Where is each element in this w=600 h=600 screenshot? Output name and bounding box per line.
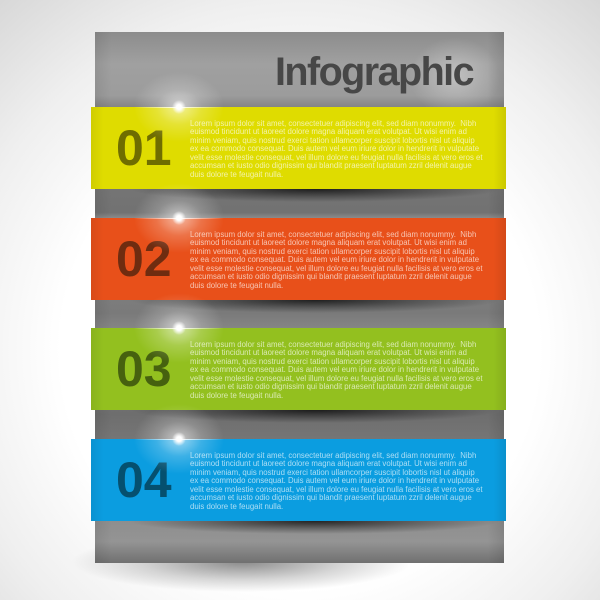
panel edge shading <box>95 32 504 563</box>
light flare 2 <box>135 186 223 250</box>
text block 02: Lorem ipsum dolor sit amet, consectetuer adipiscing elit, sed diam nonummy. Nibh euismod tincidunt ut laoreet dolore magna aliquam erat volutpat. Ut wisi enim ad minim veniam, quis nostrud exerci tation ullamcorper suscipit lobortis nisl ut aliquip ex ea commodo consequat. Duis autem vel eum iriure dolor in hendrerit in vulputate velit esse molestie consequat, vel illum dolore eu feugiat nulla facilisis at vero eros et accumsan et iusto odio dignissim qui blandit praesent luptatum zzril delenit augue duis dolore te feugait nulla. <box>190 230 483 290</box>
number 02: 02 <box>116 231 172 287</box>
band shadow 2 <box>130 300 500 313</box>
light flare 3 <box>136 296 222 360</box>
light flare 4 <box>135 408 223 471</box>
panel: band 04 <box>91 439 506 521</box>
panel: band 01 <box>91 107 506 189</box>
text block 01: Lorem ipsum dolor sit amet, consectetuer adipiscing elit, sed diam nonummy. Nibh euismod tincidunt ut laoreet dolore magna aliquam erat volutpat. Ut wisi enim ad minim veniam, quis nostrud exerci tation ullamcorper suscipit lobortis nisl ut aliquip ex ea commodo consequat. Duis autem vel eum iriure dolor in hendrerit in vulputate velit esse molestie consequat, vel illum dolore eu feugiat nulla facilisis at vero eros et accumsan et iusto odio dignissim qui blandit praesent luptatum zzril delenit augue duis dolore te feugait nulla. <box>190 119 483 179</box>
panel: band 03 <box>91 328 506 410</box>
number 04: 04 <box>116 452 172 508</box>
text block 04: Lorem ipsum dolor sit amet, consectetuer adipiscing elit, sed diam nonummy. Nibh euismod tincidunt ut laoreet dolore magna aliquam erat volutpat. Ut wisi enim ad minim veniam, quis nostrud exerci tation ullamcorper suscipit lobortis nisl ut aliquip ex ea commodo consequat. Duis autem vel eum iriure dolor in hendrerit in vulputate velit esse molestie consequat, vel illum dolore eu feugiat nulla facilisis at vero eros et accumsan et iusto odio dignissim qui blandit praesent luptatum zzril delenit augue duis dolore te feugait nulla. <box>190 451 483 511</box>
band shadow 4 <box>130 521 500 534</box>
light flare 1 <box>135 80 223 139</box>
panel: band 02 <box>91 218 506 300</box>
title: Infographic <box>275 50 473 94</box>
title glow <box>410 37 500 117</box>
panel shadow <box>72 532 412 592</box>
band shadow 1 <box>130 189 500 202</box>
band shadow 3 <box>130 410 500 423</box>
panel: grey board <box>95 32 504 563</box>
text block 03: Lorem ipsum dolor sit amet, consectetuer adipiscing elit, sed diam nonummy. Nibh euismod tincidunt ut laoreet dolore magna aliquam erat volutpat. Ut wisi enim ad minim veniam, quis nostrud exerci tation ullamcorper suscipit lobortis nisl ut aliquip ex ea commodo consequat. Duis autem vel eum iriure dolor in hendrerit in vulputate velit esse molestie consequat, vel illum dolore eu feugiat nulla facilisis at vero eros et accumsan et iusto odio dignissim qui blandit praesent luptatum zzril delenit augue duis dolore te feugait nulla. <box>190 340 483 400</box>
number 03: 03 <box>116 341 172 397</box>
number 01: 01 <box>116 120 172 176</box>
